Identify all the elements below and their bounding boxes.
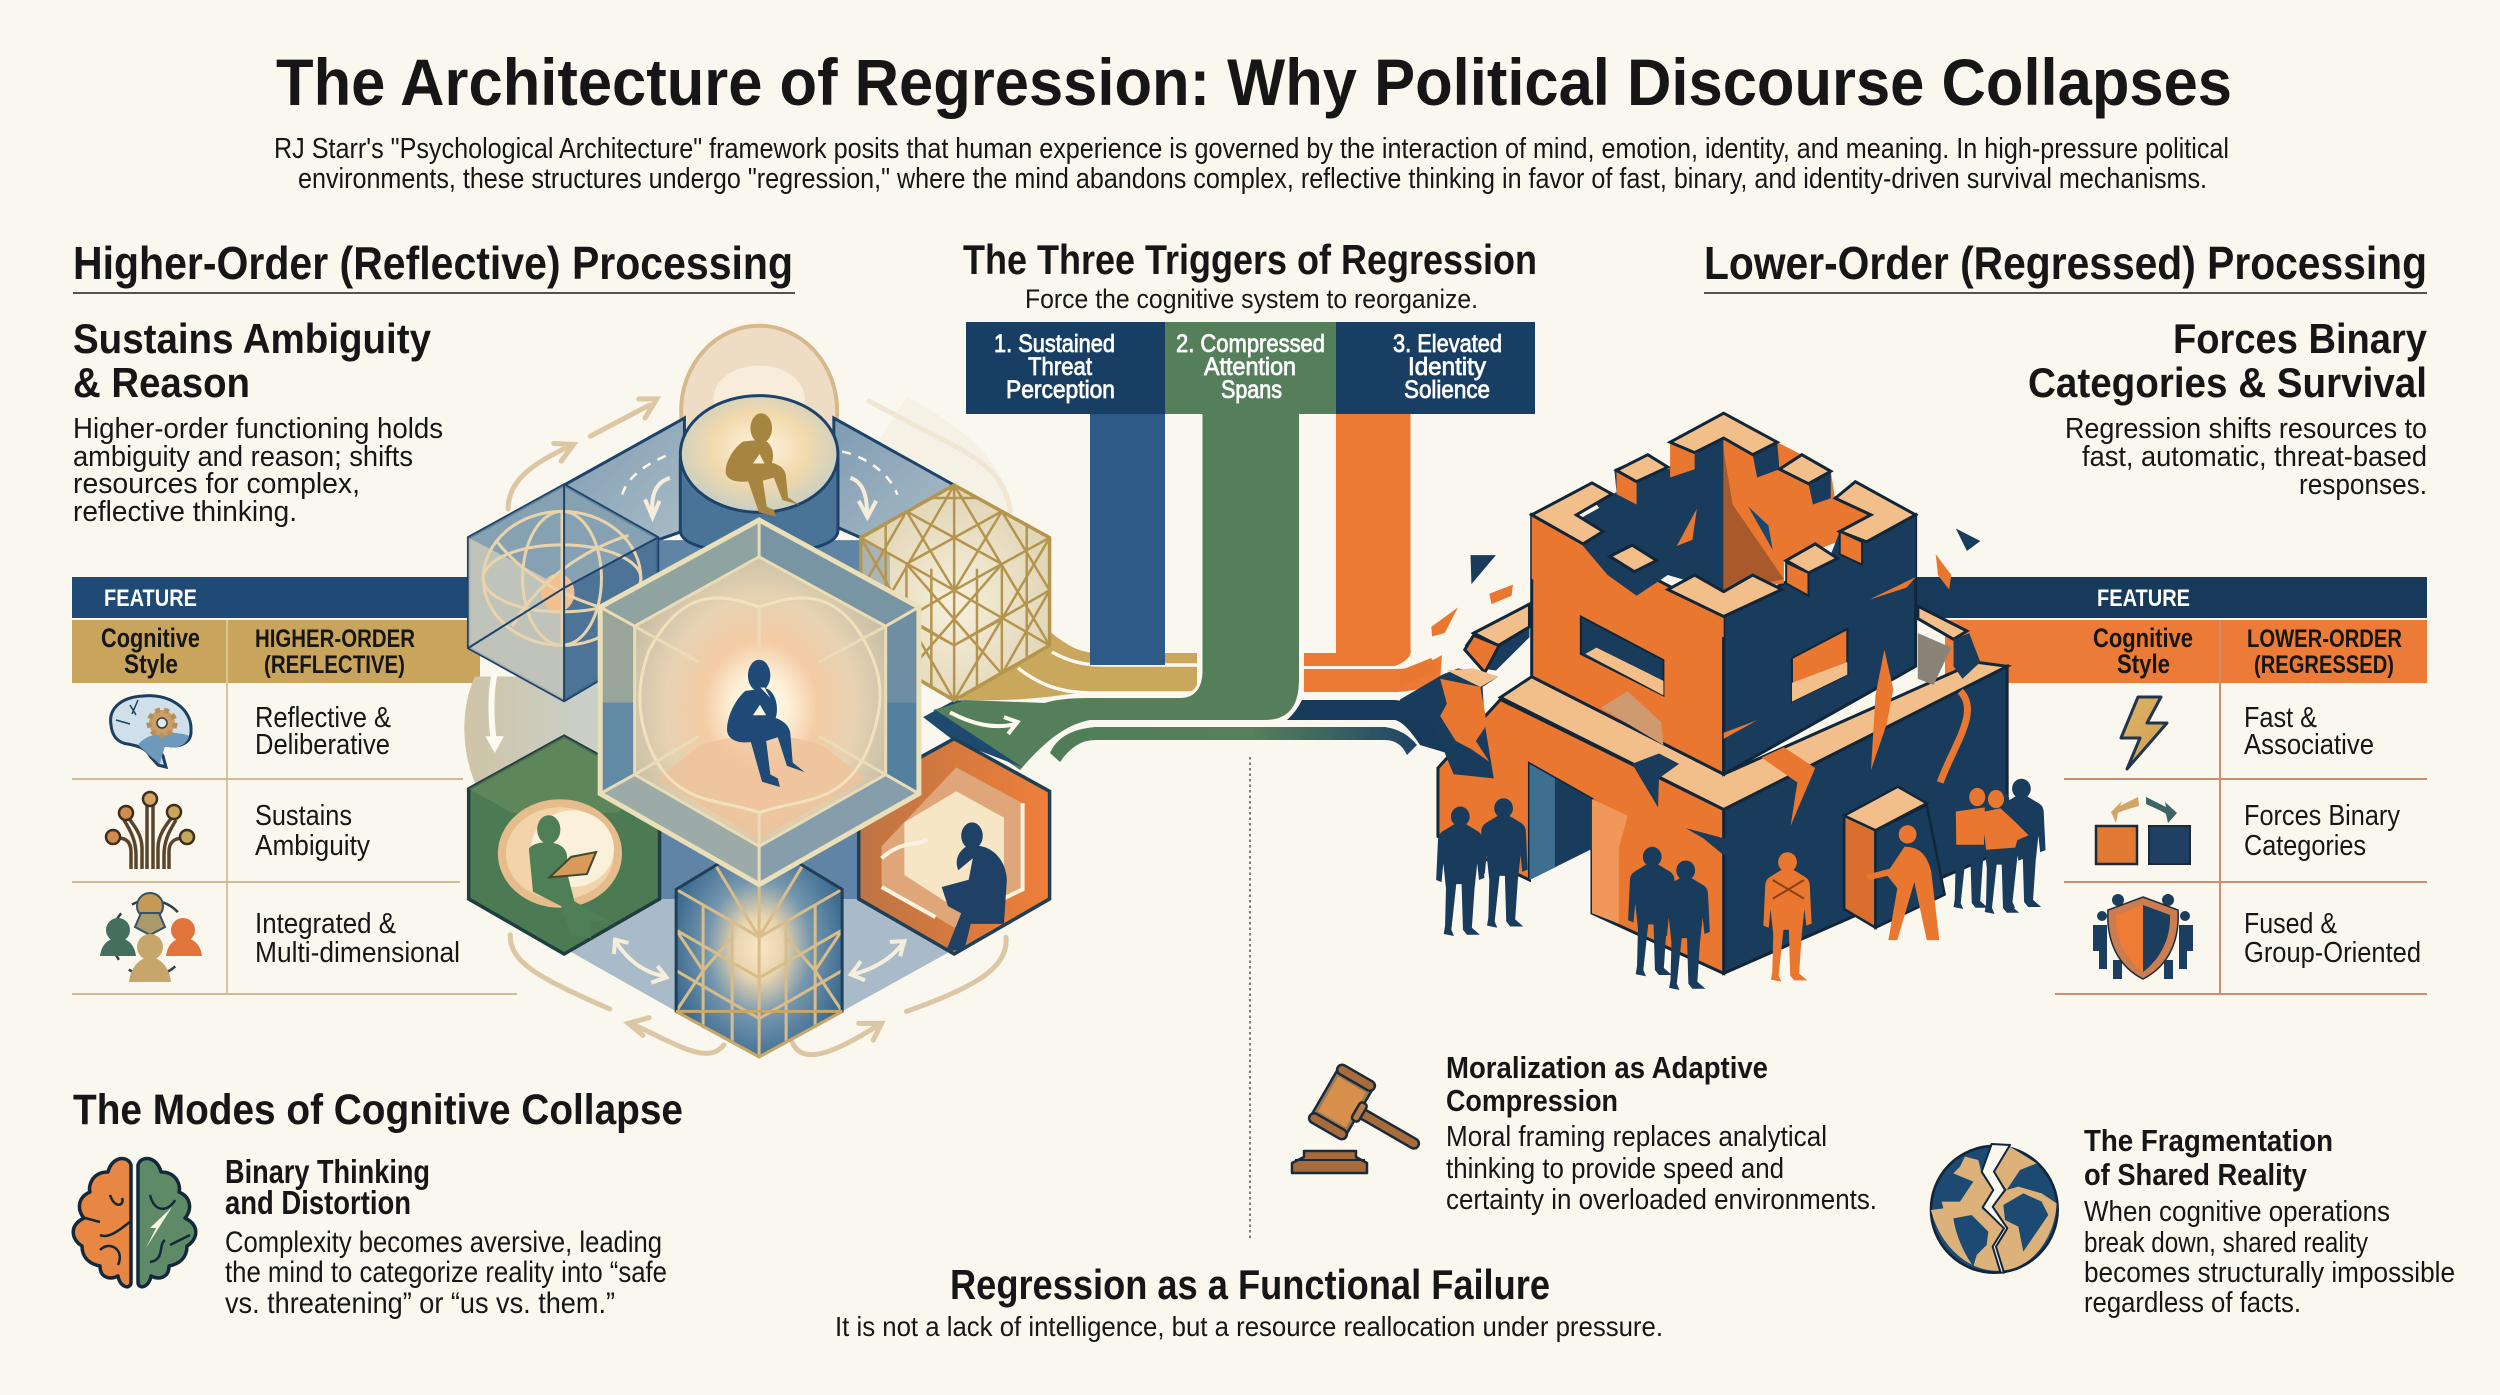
trigger 3: Identity	[1408, 353, 1486, 381]
left table: Integrated &	[255, 908, 396, 940]
icon: fractured globe	[1931, 1144, 2058, 1273]
heading: three triggers	[963, 236, 1537, 314]
flying debris	[1431, 529, 1980, 636]
text block: forces binary	[2028, 315, 2428, 501]
right lattice cube	[861, 485, 1050, 700]
text block: binary thinking: Binary Thinking	[225, 1153, 430, 1190]
intro text: environments, these structures undergo "regression," where the mind abandons complex, reflective thinking in favor of fast, binary, and identity-driven survival mechanisms.	[298, 163, 2207, 195]
bar: sustained threat perception	[1090, 414, 1165, 665]
right table: Cognitive	[2093, 623, 2193, 653]
text block: fragmentation of shared reality: of Shared Reality	[2084, 1157, 2308, 1192]
arrows on streams	[485, 672, 1018, 753]
trigger 3: 3. Elevated	[1393, 330, 1502, 358]
right table: Forces Binary	[2244, 800, 2400, 832]
flow band: navy stream	[1287, 690, 1470, 760]
orange hexagon with thinking figure	[859, 739, 1050, 954]
left table: Ambiguity	[255, 830, 370, 862]
icon: brain with gear	[111, 696, 191, 767]
text block: fragmentation of shared reality: When cognitive operations	[2084, 1196, 2390, 1228]
text block: moralization: Moral framing replaces analytical	[1446, 1121, 1827, 1153]
text block: forces binary: Regression shifts resources to	[2065, 413, 2427, 445]
icon: gavel	[1292, 1063, 1435, 1175]
right table: Categories	[2244, 830, 2366, 862]
icon: integrated people	[100, 893, 202, 982]
left table: (REFLECTIVE)	[264, 651, 405, 679]
text block: forces binary: responses.	[2299, 469, 2427, 501]
text block: sustains ambiguity: Sustains Ambiguity	[73, 315, 432, 362]
intro text: RJ Starr's "Psychological Architecture" framework posits that human experience is governed by the interaction of mind, emotion, identity, and meaning. In high-pressure political	[274, 133, 2229, 165]
fortress: tower faces	[1532, 438, 1916, 774]
trigger 1	[994, 330, 1115, 404]
left table: Sustains	[255, 800, 352, 832]
left table	[72, 577, 517, 995]
double arrows	[614, 940, 904, 983]
text block: fragmentation of shared reality: The Fragmentation	[2084, 1123, 2333, 1158]
right table: Fast &	[2244, 702, 2317, 734]
fortress: merlon and window details	[1581, 507, 1967, 855]
crowd: orange figures	[1763, 788, 2029, 982]
text block: regression as functional failure	[835, 1261, 1663, 1342]
section: modes of cognitive collapse: The Modes of Cognitive Collapse	[73, 1086, 683, 1134]
right table: Associative	[2244, 729, 2374, 761]
text block: moralization: certainty in overloaded environments.	[1446, 1184, 1877, 1216]
text block: moralization: Compression	[1446, 1083, 1618, 1118]
text block: sustains ambiguity: & Reason	[73, 359, 250, 406]
blue slab panels	[564, 418, 1023, 1011]
trigger 1: 1. Sustained	[994, 330, 1115, 358]
text block: forces binary: fast, automatic, threat-based	[2082, 441, 2427, 473]
text block: sustains ambiguity: ambiguity and reason; shifts	[73, 441, 413, 473]
left table: Cognitive	[101, 623, 200, 653]
right table: Group-Oriented	[2244, 937, 2421, 969]
text block: forces binary: Forces Binary	[2173, 315, 2428, 362]
illustration: fractured isometric fortress with crowd	[1400, 413, 2046, 990]
trigger 2: Spans	[1221, 376, 1282, 404]
icon: branching ideas	[106, 792, 194, 869]
right table: Fused &	[2244, 908, 2337, 940]
icon: binary categories	[2096, 797, 2190, 864]
icon: split brain	[73, 1159, 196, 1287]
text block: binary thinking	[225, 1153, 667, 1320]
divider: vertical dotted	[1249, 757, 1251, 1240]
flow band: tan higher-order stream	[960, 590, 1197, 700]
text block: moralization: Moralization as Adaptive	[1446, 1050, 1768, 1085]
heading: three triggers: Force the cognitive system to reorganize.	[1025, 284, 1478, 314]
trigger 3: Solience	[1404, 376, 1490, 404]
text block: fragmentation of shared reality: regardless of facts.	[2084, 1287, 2301, 1319]
right table: LOWER-ORDER	[2247, 625, 2402, 653]
icon: shield with group	[2093, 894, 2193, 979]
right table: FEATURE	[2097, 585, 2190, 612]
trigger 2	[1176, 330, 1325, 404]
right table	[1905, 577, 2427, 995]
heading: three triggers: The Three Triggers of Regression	[963, 236, 1537, 283]
text block: sustains ambiguity: Higher-order functioning holds	[73, 413, 443, 445]
text block: binary thinking: vs. threatening” or “us vs. them.”	[225, 1287, 615, 1320]
trigger 2: 2. Compressed	[1176, 330, 1325, 358]
trigger 1: Perception	[1006, 376, 1115, 404]
text block: forces binary: Categories & Survival	[2028, 359, 2427, 406]
left table: Style	[124, 649, 178, 679]
bar: compressed attention	[933, 414, 1299, 770]
circulating arrows	[508, 399, 1010, 1055]
heading: lower-order processing: Lower-Order (Regressed) Processing	[1704, 237, 2427, 289]
left table: FEATURE	[104, 585, 197, 612]
text block: regression as functional failure: It is not a lack of intelligence, but a resource reallocation under pressure.	[835, 1311, 1663, 1342]
text block: sustains ambiguity: reflective thinking.	[73, 496, 297, 528]
trigger 3	[1393, 330, 1502, 404]
fortress: small doorway block	[1844, 787, 1945, 928]
top sphere	[681, 326, 837, 496]
left table: Deliberative	[255, 729, 390, 761]
text block: sustains ambiguity: resources for complex,	[73, 468, 360, 500]
crowd: navy figures	[1436, 779, 2046, 990]
title: The Architecture of Regression: Why Political Discourse Collapses	[276, 45, 2232, 119]
left table: HIGHER-ORDER	[255, 625, 415, 653]
text block: binary thinking: Complexity becomes aversive, leading	[225, 1226, 662, 1259]
flow outlines	[1032, 414, 1412, 765]
fortress: lower level	[1400, 604, 2007, 973]
fortress: battlement tops	[1532, 413, 1916, 617]
halo backdrop	[464, 397, 1010, 798]
trigger 1: Threat	[1028, 353, 1092, 381]
right table: (REGRESSED)	[2254, 651, 2394, 679]
text block: moralization: thinking to provide speed and	[1446, 1153, 1784, 1185]
intro text	[274, 133, 2229, 195]
left sphere cube	[469, 485, 657, 700]
green hexagon with laptop figure	[469, 736, 660, 954]
heading: higher-order processing: Higher-Order (Reflective) Processing	[73, 237, 793, 289]
left table: Multi-dimensional	[255, 937, 460, 969]
flow band: green to navy stream	[1050, 727, 1417, 762]
text block: binary thinking: the mind to categorize reality into “safe	[225, 1256, 667, 1289]
text block: fragmentation of shared reality	[2084, 1123, 2455, 1319]
bar: elevated identity salience	[1304, 414, 1442, 692]
text block: fragmentation of shared reality: becomes structurally impossible	[2084, 1257, 2455, 1289]
left table: Reflective &	[255, 702, 391, 734]
cylinder with reflecting figure	[622, 396, 897, 554]
illustration: psychological architecture hexagon	[464, 326, 1050, 1057]
trigger 2: Attention	[1204, 353, 1296, 381]
text block: sustains ambiguity	[73, 315, 443, 528]
text block: regression as functional failure: Regression as a Functional Failure	[950, 1261, 1550, 1308]
panel: triggers header	[966, 322, 1535, 414]
text block: moralization	[1446, 1050, 1877, 1216]
bottom lattice cube	[676, 839, 842, 1057]
right table: Style	[2117, 649, 2170, 679]
text block: binary thinking: and Distortion	[225, 1184, 411, 1221]
central hexagon with reflective figure	[600, 520, 919, 885]
icon: lightning bolt	[2121, 697, 2167, 769]
text block: fragmentation of shared reality: break down, shared reality	[2084, 1227, 2368, 1259]
